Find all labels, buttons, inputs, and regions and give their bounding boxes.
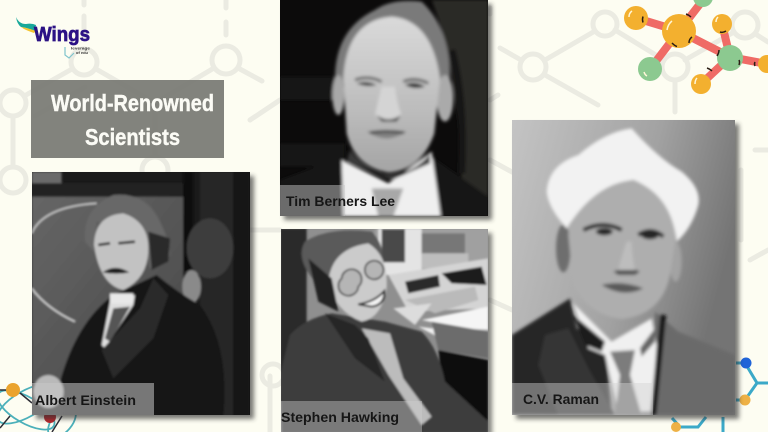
photo panel: Stephen Hawking [280,228,492,432]
bottom-right molecule illustration [671,358,768,432]
name label: Tim Berners Lee [280,185,395,216]
logo: Wings by Leverage Edu: leverage [71,46,91,50]
bottom-left atom illustration [0,377,81,432]
title panel [31,80,224,158]
portrait: Albert Einstein [32,172,252,417]
photo panel: C.V. Raman [512,118,739,419]
title text: Scientists [85,124,180,150]
title text: World-Renowned [51,90,214,116]
portrait: Stephen Hawking [280,228,488,432]
photo panel: Tim Berners Lee [280,0,492,220]
logo: Wings by Leverage Edu: of edu [76,50,89,55]
portrait: Tim Berners Lee [280,0,488,217]
name label: C.V. Raman: C.V. Raman [523,391,599,407]
name label: Albert Einstein [32,383,154,415]
name label: Tim Berners Lee: Tim Berners Lee [286,193,395,209]
molecule illustration [624,0,768,94]
portrait: C.V. Raman [512,118,737,417]
name label: Albert Einstein: Albert Einstein [35,392,136,408]
name label: Stephen Hawking: Stephen Hawking [281,409,399,425]
name label: C.V. Raman [512,383,653,415]
logo: Wings by Leverage Edu [16,17,91,58]
logo: Wings by Leverage Edu: Wings [34,24,90,46]
name label: Stephen Hawking [281,401,422,432]
photo panel: Albert Einstein [32,172,254,419]
